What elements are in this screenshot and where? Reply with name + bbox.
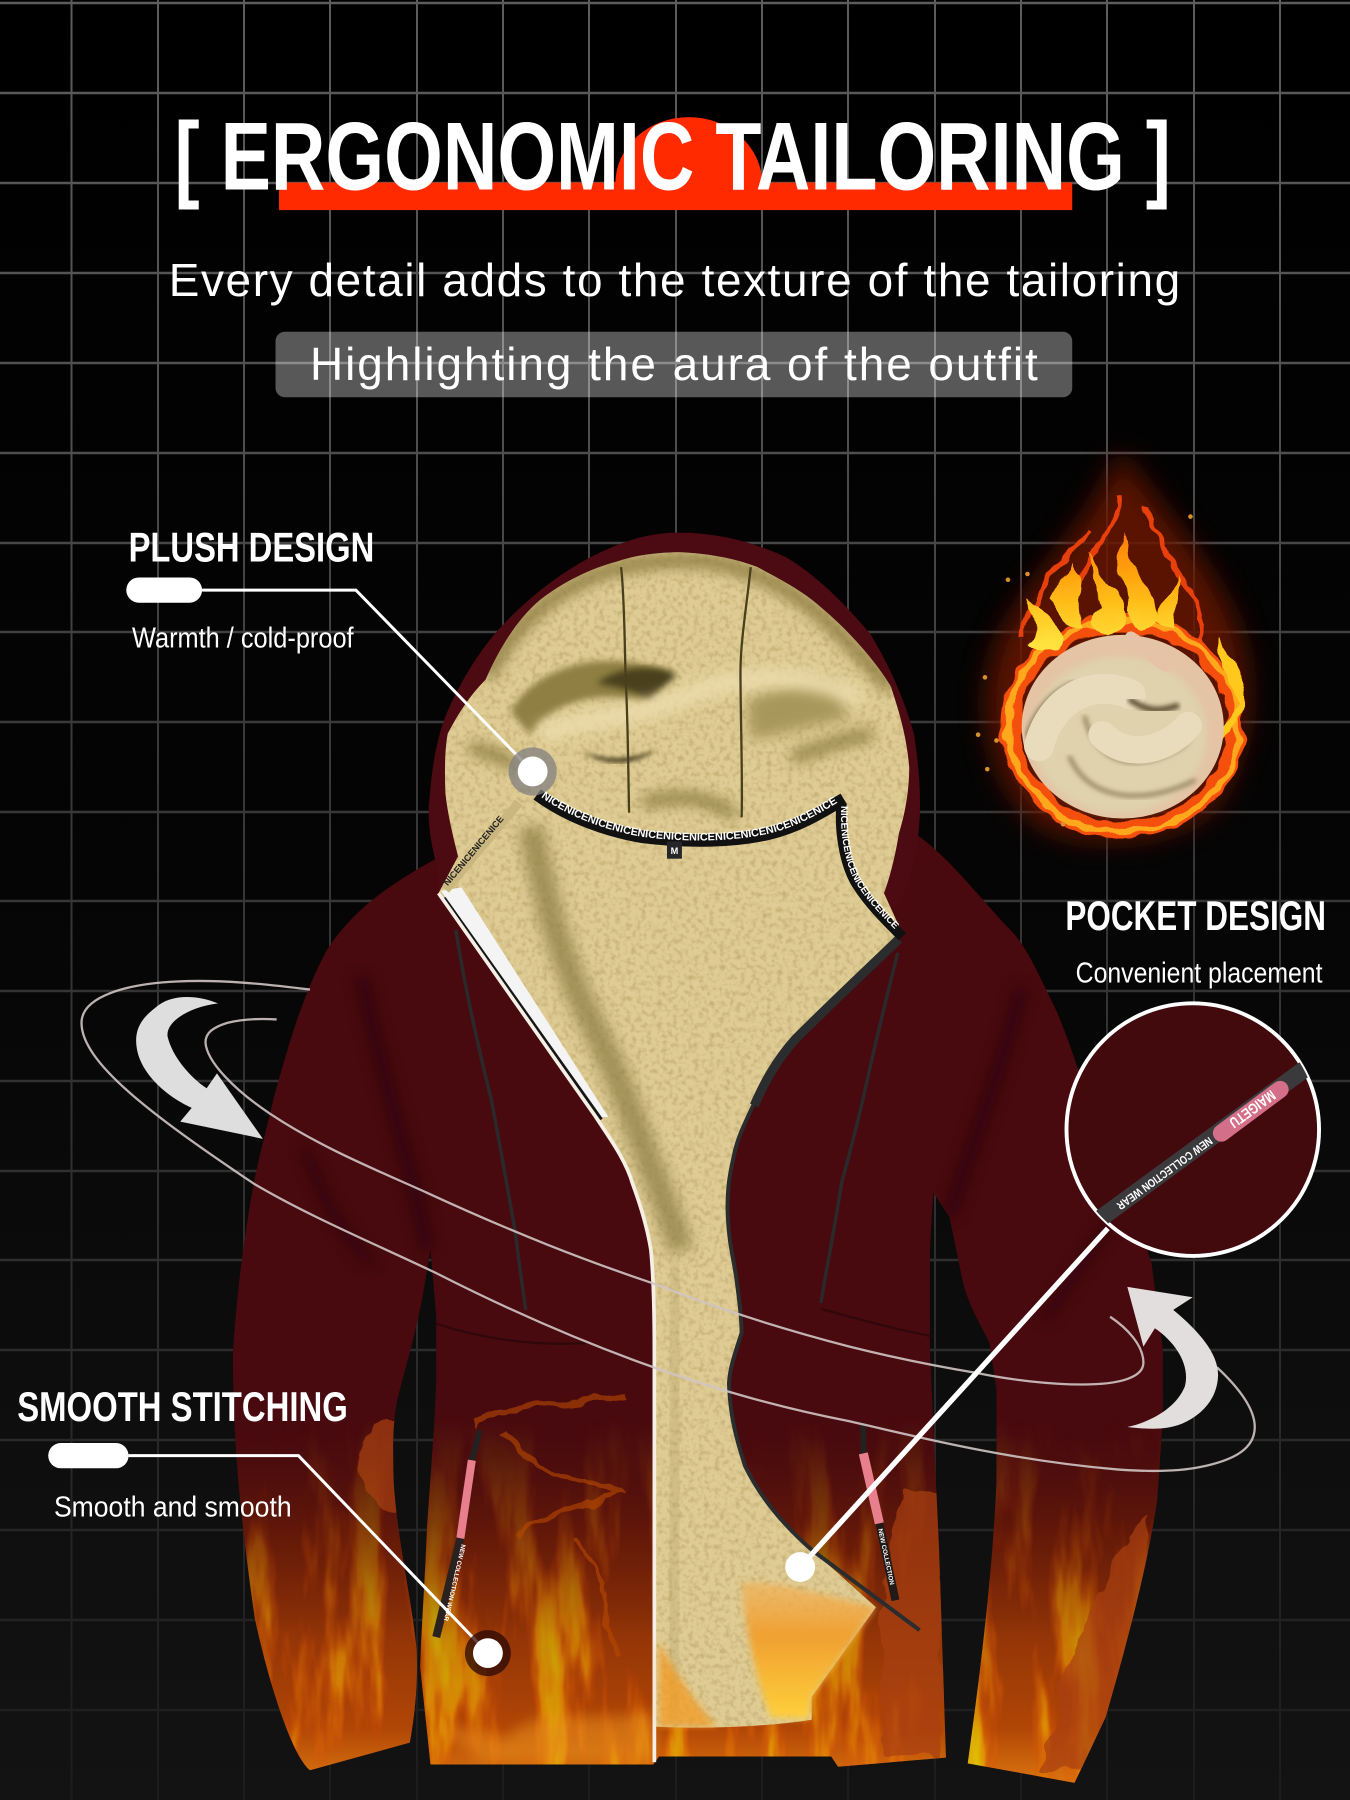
fleece shadows and folds (470, 560, 890, 1722)
left collar tape with text: NICENICENICENICE (442, 814, 506, 888)
right pocket zipper tape (863, 1424, 895, 1600)
flames on hoodie (238, 1393, 1160, 1783)
orbit arc lines (82, 981, 1255, 1471)
right zipper (728, 939, 920, 1630)
highlighted subtitle pill: Highlighting the aura of the outfit (310, 338, 1038, 390)
subtitle: Every detail adds to the texture of the tailoring (169, 254, 1180, 306)
callout: plush design: PLUSH DESIGN (129, 524, 374, 570)
icon: flaming fleece ball (976, 450, 1248, 840)
callout: smooth stitching: Smooth and smooth (54, 1492, 292, 1524)
hoodie fold shading (304, 976, 1114, 1320)
pocket zoom circle: NEW COLLECTION WEAR (1114, 1134, 1214, 1212)
drawstrings (456, 930, 898, 1310)
hoodie body and sleeves (233, 836, 1163, 1783)
callout: smooth stitching (17, 1384, 511, 1676)
hood outer shell (429, 533, 920, 907)
callout: smooth stitching: SMOOTH STITCHING (17, 1384, 348, 1430)
left collar tape with text (442, 802, 519, 890)
icon: left curved arrow (136, 997, 263, 1139)
right pocket zipper tape: NEW COLLECTION (876, 1528, 895, 1586)
size label: M (671, 846, 679, 856)
right collar tape with text: NICENICENICENICENICENICE (840, 806, 900, 929)
fleece flame glow (742, 1582, 876, 1719)
waistband seams (436, 1309, 932, 1344)
left pocket zipper tape: NEW COLLECTION WEAR (442, 1544, 466, 1622)
title accent: red sun and bar (279, 117, 1072, 210)
pocket zoom circle (1066, 1003, 1319, 1256)
pocket zoom circle: MAIGETU (1226, 1086, 1278, 1131)
callout: pocket design (785, 893, 1326, 1582)
left zipper (439, 887, 654, 1762)
left pocket zipper tape (436, 1430, 480, 1637)
icon: right curved arrow (1127, 1287, 1218, 1429)
size label (667, 841, 682, 859)
fleece lining (439, 552, 909, 1728)
neck tape with text: NICENICENICENICENICENICENICENICENICENICENICENICE (542, 791, 838, 841)
callout: plush design: Warmth / cold-proof (132, 622, 354, 654)
hoodie (178, 532, 1222, 1783)
hood seams (621, 567, 751, 817)
callout: plush design (126, 524, 557, 796)
